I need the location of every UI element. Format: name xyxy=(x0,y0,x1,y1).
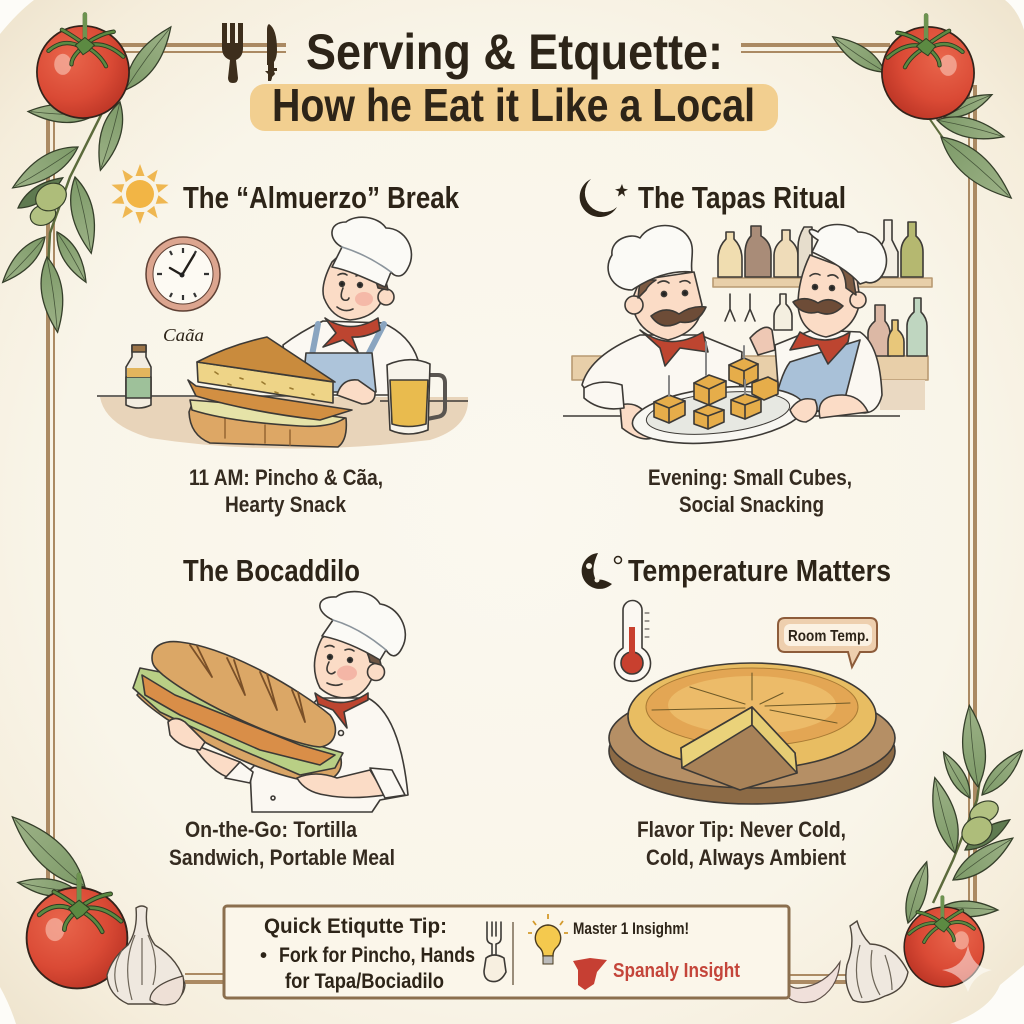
heading: The “Almuerzo” Break xyxy=(183,180,460,215)
icon: hand holding fork xyxy=(484,922,506,982)
icon: sun xyxy=(110,164,170,224)
sandwich xyxy=(133,642,405,798)
title: Serving & Etquette: xyxy=(306,24,723,80)
caption: Evening: Small Cubes, xyxy=(648,465,852,490)
title xyxy=(250,24,778,131)
caption xyxy=(637,817,846,870)
caption: 11 AM: Pincho & Cãa, xyxy=(189,465,383,490)
botanical: top-right corner xyxy=(828,15,1019,207)
icon: moon and dots xyxy=(582,553,622,589)
speech bubble: Room Temp. xyxy=(778,618,877,667)
heading: The Tapas Ritual xyxy=(638,180,846,215)
section: Almuerzo break xyxy=(97,164,468,517)
garlic left xyxy=(107,906,185,1005)
speech bubble: Room Temp.: Room Temp. xyxy=(788,628,869,645)
caption: Cold, Always Ambient xyxy=(646,845,846,870)
icon: lightbulb xyxy=(528,914,568,964)
left chef xyxy=(582,226,742,439)
tip text: Fork for Pincho, Hands xyxy=(279,943,475,967)
heading: The Bocaddilo xyxy=(183,553,360,588)
tip text: Quick Etiqutte Tip: xyxy=(264,914,447,938)
chef 3 xyxy=(195,592,408,812)
plate of tortilla cubes xyxy=(630,327,817,451)
botanical: bottom-right corner xyxy=(780,704,1024,1003)
tortilla pincho on bread xyxy=(188,337,352,447)
subtitle highlight xyxy=(250,84,778,131)
caption xyxy=(189,465,383,517)
heading: Temperature Matters xyxy=(628,553,891,588)
brand: Spanaly Insight xyxy=(613,960,740,982)
garlic right xyxy=(846,921,908,1002)
bar back: shelf and bottles xyxy=(572,220,932,410)
bottle xyxy=(126,345,151,408)
caption: Sandwich, Portable Meal xyxy=(169,845,395,870)
right chef xyxy=(773,224,886,418)
caption xyxy=(648,465,852,517)
caption xyxy=(169,817,395,870)
subtitle: How he Eat it Like a Local xyxy=(272,79,755,131)
beer mug xyxy=(387,360,445,434)
caption: Social Snacking xyxy=(679,492,824,517)
counter line xyxy=(563,415,900,417)
icon: thermometer xyxy=(614,600,650,681)
icon: wall clock xyxy=(146,237,220,311)
icon: fork and knife xyxy=(222,23,277,83)
garlic clove xyxy=(780,962,840,1003)
counter line xyxy=(97,396,468,401)
icon: Spain map xyxy=(573,958,607,990)
insight line: Master 1 Insighm! xyxy=(573,920,689,938)
tip text: for Tapa/Bociadilo xyxy=(285,969,444,993)
tip text: • xyxy=(260,945,267,967)
section: Tapas ritual xyxy=(563,179,932,517)
caption: Flavor Tip: Never Cold, xyxy=(637,817,846,842)
sparkle xyxy=(942,945,992,992)
counter wash xyxy=(100,397,468,449)
botanical: top-left corner xyxy=(0,14,179,334)
panel: quick etiquette tip xyxy=(224,906,789,998)
botanical: bottom-left corner xyxy=(3,807,185,1005)
caption: Hearty Snack xyxy=(225,492,346,517)
label: Caña: Caãa xyxy=(163,325,204,345)
section: Temperature xyxy=(582,553,895,870)
tortilla on board xyxy=(609,663,895,804)
icon: moon and star xyxy=(580,179,628,217)
section: Bocadillo xyxy=(133,553,408,870)
tip text xyxy=(260,914,475,993)
chef 1 xyxy=(283,217,418,404)
caption: On-the-Go: Tortilla xyxy=(185,817,357,842)
divider xyxy=(512,922,514,985)
